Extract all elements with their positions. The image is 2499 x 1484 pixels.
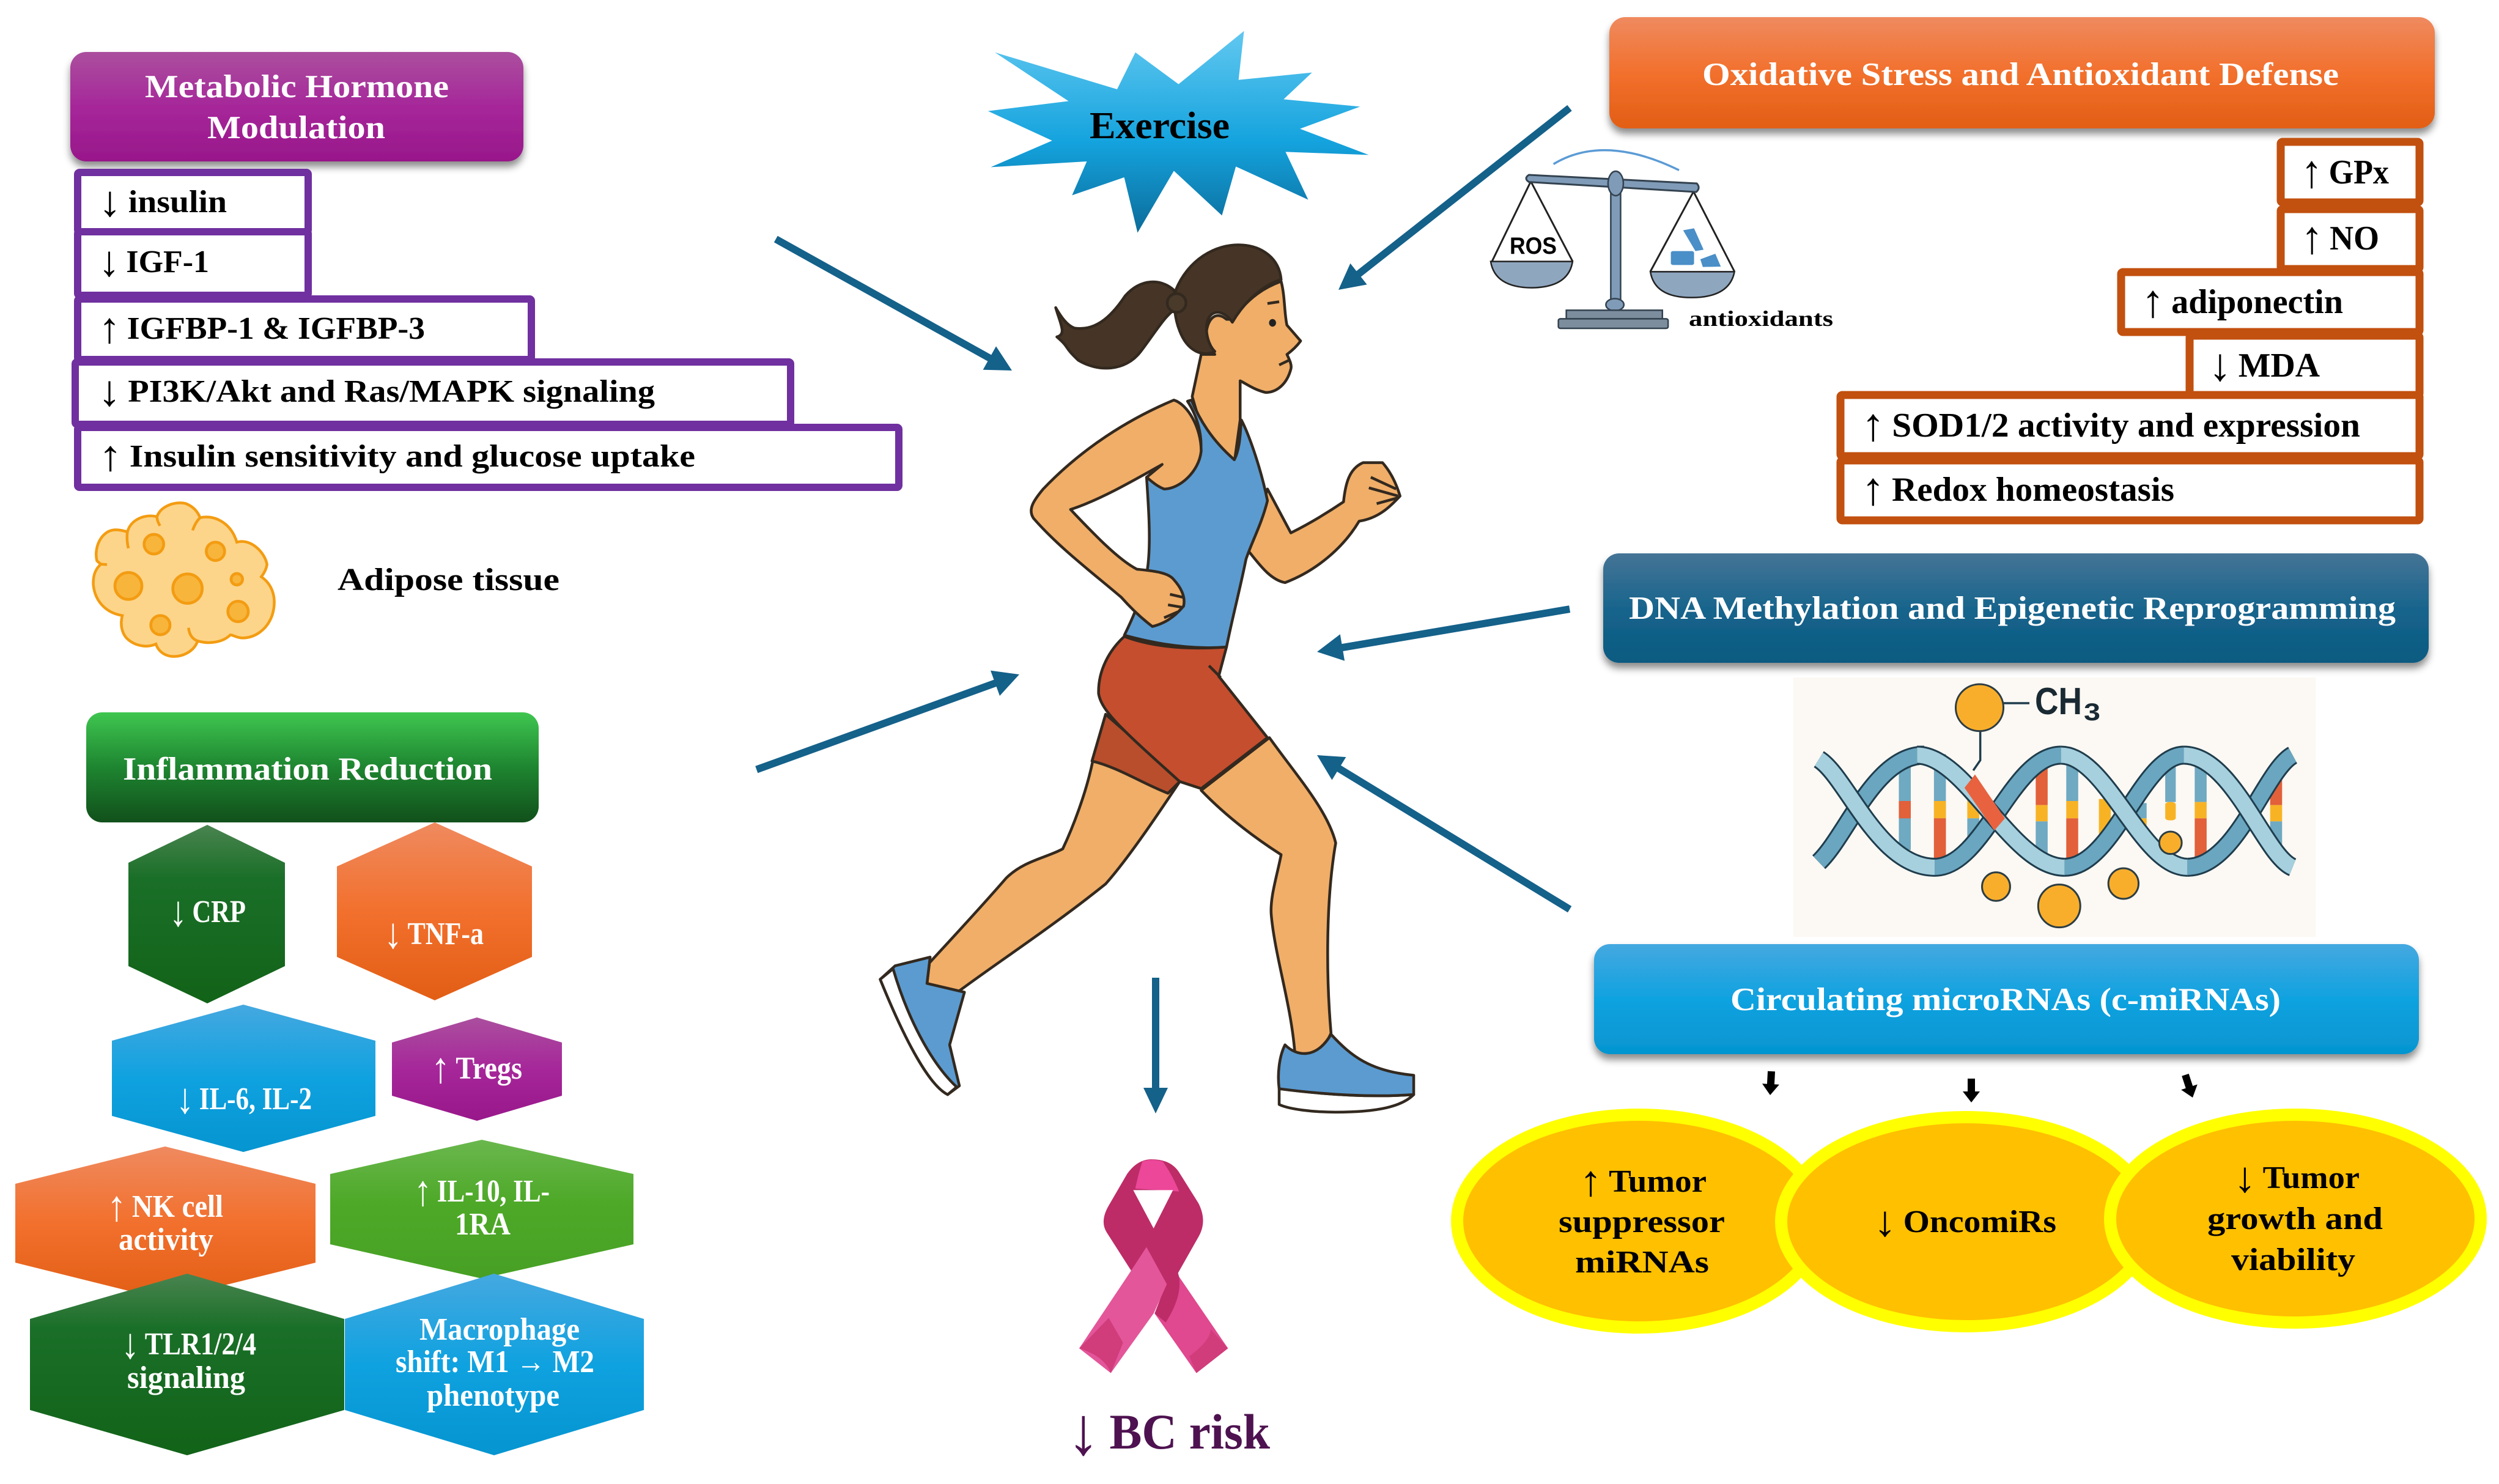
oval: OncomiRs (1781, 1117, 2150, 1326)
item: redox homeostasis: Redox homeostasis (1885, 471, 2174, 509)
heading: oxidative stress: Oxidative Stress and Antioxidant Defense (1702, 57, 2339, 92)
shorts (1092, 637, 1268, 793)
hexagon: IL-6, IL-2: IL-6, IL-2 (194, 1082, 312, 1117)
panel: DNA methylation and epigenetic reprogramming (1603, 553, 2429, 937)
face and neck (1192, 281, 1301, 463)
item: IGFBP: ↑ (98, 305, 120, 352)
item: NO (2281, 209, 2420, 269)
hexagon: TLR signaling: TLR1/2/4 (139, 1327, 256, 1362)
hexagon: macrophage shift: phenotype (427, 1378, 559, 1413)
starburst: exercise: Exercise (1090, 105, 1230, 147)
icon: ROS antioxidant balance scale (1491, 150, 1735, 328)
item: insulin sensitivity: ↑ (98, 432, 122, 480)
icon: adipose tissue (94, 503, 275, 657)
oval: tumor suppressor miRNAs (1457, 1115, 1820, 1327)
right shoe (1279, 1035, 1414, 1112)
heading: metabolic hormone modulation: Modulation (207, 110, 385, 146)
illustration: running woman (880, 245, 1414, 1112)
heading: DNA methylation (1603, 553, 2429, 663)
outcome: reduced breast cancer risk: BC risk (1100, 1404, 1270, 1460)
item: insulin (78, 172, 308, 232)
item: adiponectin: ↑ (2141, 276, 2165, 327)
hexagon: TNF-a (337, 822, 532, 1000)
item: IGF-1: ↓ (98, 238, 120, 286)
item: SOD1/2: ↑ (1861, 400, 1885, 451)
left shoe (880, 957, 964, 1095)
heading: circulating microRNAs (1594, 944, 2419, 1054)
item: SOD1/2 (1840, 395, 2420, 456)
hexagon: IL-10, IL-1RA: IL-10, IL- (432, 1174, 550, 1209)
front leg (1201, 737, 1335, 1055)
item: insulin sensitivity (78, 427, 899, 487)
hexagon: IL-10, IL-1RA (330, 1140, 633, 1279)
hexagon: Tregs: Tregs (450, 1051, 522, 1086)
item: PI3K signaling (75, 362, 791, 424)
hexagon: IL-6, IL-2 (112, 1005, 375, 1152)
item: IGF-1 (78, 232, 308, 295)
label: adipose tissue: Adipose tissue (338, 563, 559, 597)
panel: metabolic hormone modulation (70, 52, 899, 657)
oval: tumor growth and viability: ↓ (2234, 1154, 2256, 1202)
outcome: reduced breast cancer risk: ↓ (1067, 1394, 1100, 1469)
panel: inflammation reduction (15, 712, 644, 1455)
hexagon: NK cell activity: activity (119, 1222, 213, 1257)
item: PI3K signaling: ↓ (98, 367, 121, 415)
illustration: DNA helix with methyl groups (1793, 677, 2316, 937)
hexagon: TLR signaling: signaling (127, 1360, 245, 1395)
hexagon: TNF-a: TNF-a (402, 917, 484, 951)
arrow: miRNA to runner (1310, 744, 1577, 921)
illustration: DNA helix with methyl groups: CH (2035, 681, 2082, 723)
item: GPx (2281, 142, 2420, 202)
hexagon: TLR signaling: ↓ (121, 1320, 139, 1368)
hexagon: Tregs: ↑ (431, 1044, 450, 1092)
tank top (1124, 400, 1268, 648)
heading: metabolic hormone modulation (70, 52, 523, 161)
oval: tumor growth and viability: Tumor (2256, 1161, 2360, 1195)
panel: circulating microRNAs (1457, 944, 2481, 1327)
item: redox homeostasis: ↑ (1861, 464, 1885, 515)
hexagon: macrophage shift (345, 1274, 644, 1455)
item: adiponectin (2121, 272, 2420, 332)
item: MDA: ↓ (2209, 340, 2232, 391)
heading: metabolic hormone modulation: Metabolic Hormone (145, 69, 449, 105)
hexagon: IL-10, IL-1RA: ↑ (414, 1167, 432, 1215)
oval: tumor suppressor miRNAs: Tumor (1602, 1164, 1707, 1199)
far arm (1248, 463, 1400, 583)
item: redox homeostasis (1840, 460, 2420, 520)
illustration: DNA helix with methyl groups: 3 (2084, 699, 2100, 726)
arrow: inflammation to runner (752, 662, 1024, 782)
item: IGFBP (78, 299, 531, 360)
back leg (927, 761, 1179, 995)
hexagon: macrophage shift: Macrophage (419, 1312, 580, 1347)
panel: oxidative stress and antioxidant defense (1491, 17, 2435, 520)
eye and brow (1268, 302, 1289, 365)
icon: ROS antioxidant balance scale: ROS (1510, 233, 1557, 259)
hexagon: Tregs (392, 1017, 562, 1121)
oval: tumor suppressor miRNAs: suppressor (1559, 1205, 1725, 1239)
heading: oxidative stress (1609, 17, 2435, 128)
heading: inflammation reduction (86, 712, 539, 822)
oval: tumor suppressor miRNAs: miRNAs (1575, 1245, 1709, 1280)
hexagon: TNF-a: ↓ (384, 910, 402, 958)
hexagon: CRP (128, 825, 285, 1003)
oval: tumor growth and viability: viability (2231, 1242, 2355, 1277)
hair tie (1167, 293, 1186, 312)
item: MDA: MDA (2232, 347, 2320, 385)
arrow: to OncomiRs (1963, 1079, 1980, 1102)
hexagon: CRP: ↓ (169, 888, 187, 936)
arrow: runner to BC risk (1143, 978, 1168, 1113)
arrow: metabolic to runner (769, 227, 1019, 382)
heading: circulating microRNAs: Circulating microRNAs (c-miRNAs) (1730, 982, 2281, 1017)
arrow: oxidative to runner (1330, 97, 1578, 300)
oval: OncomiRs: OncomiRs (1897, 1205, 2056, 1239)
hexagon: IL-10, IL-1RA: 1RA (455, 1207, 511, 1242)
hexagon: NK cell activity (15, 1146, 316, 1300)
heading: DNA methylation: DNA Methylation and Epigenetic Reprogramming (1629, 591, 2396, 626)
near arm (1031, 400, 1201, 627)
item: NO: ↑ (2301, 213, 2323, 264)
starburst: exercise (988, 31, 1369, 233)
hair (1175, 245, 1281, 353)
item: GPx: ↑ (2301, 147, 2322, 197)
arrow: to tumor growth (2177, 1072, 2201, 1100)
item: PI3K signaling: PI3K/Akt and Ras/MAPK signaling (121, 374, 655, 409)
hexagon: NK cell activity: NK cell (127, 1189, 223, 1224)
item: GPx: GPx (2322, 153, 2389, 191)
hexagon: macrophage shift: shift: M1 → M2 (396, 1345, 594, 1379)
oval: OncomiRs: ↓ (1873, 1198, 1897, 1246)
oval: tumor growth and viability: growth and (2207, 1202, 2383, 1236)
arrow: DNA methylation to runner (1315, 596, 1572, 665)
item: SOD1/2: SOD1/2 activity and expression (1885, 407, 2360, 445)
hexagon: IL-6, IL-2: ↓ (176, 1075, 194, 1123)
item: IGFBP: IGFBP-1 & IGFBP-3 (120, 311, 425, 346)
label: antioxidants: antioxidants (1689, 306, 1833, 331)
heading: inflammation reduction: Inflammation Reduction (123, 751, 492, 787)
hexagon: NK cell activity: ↑ (107, 1183, 127, 1230)
arrow: to tumor suppressor (1762, 1071, 1780, 1096)
oval: tumor suppressor miRNAs: ↑ (1579, 1157, 1602, 1205)
item: insulin: insulin (122, 185, 227, 220)
item: adiponectin: adiponectin (2165, 283, 2343, 321)
hexagon: TLR signaling (30, 1274, 344, 1455)
hexagon: CRP: CRP (187, 895, 246, 929)
item: insulin: ↓ (98, 178, 122, 226)
item: insulin sensitivity: Insulin sensitivity and glucose uptake (122, 439, 695, 474)
ponytail (1056, 282, 1178, 368)
icon: awareness ribbon (1079, 1159, 1228, 1373)
item: IGF-1: IGF-1 (120, 245, 209, 279)
finger lines (1164, 478, 1398, 618)
oval: tumor growth and viability (2110, 1115, 2481, 1323)
item: MDA (2190, 336, 2420, 395)
item: NO: NO (2323, 220, 2379, 257)
